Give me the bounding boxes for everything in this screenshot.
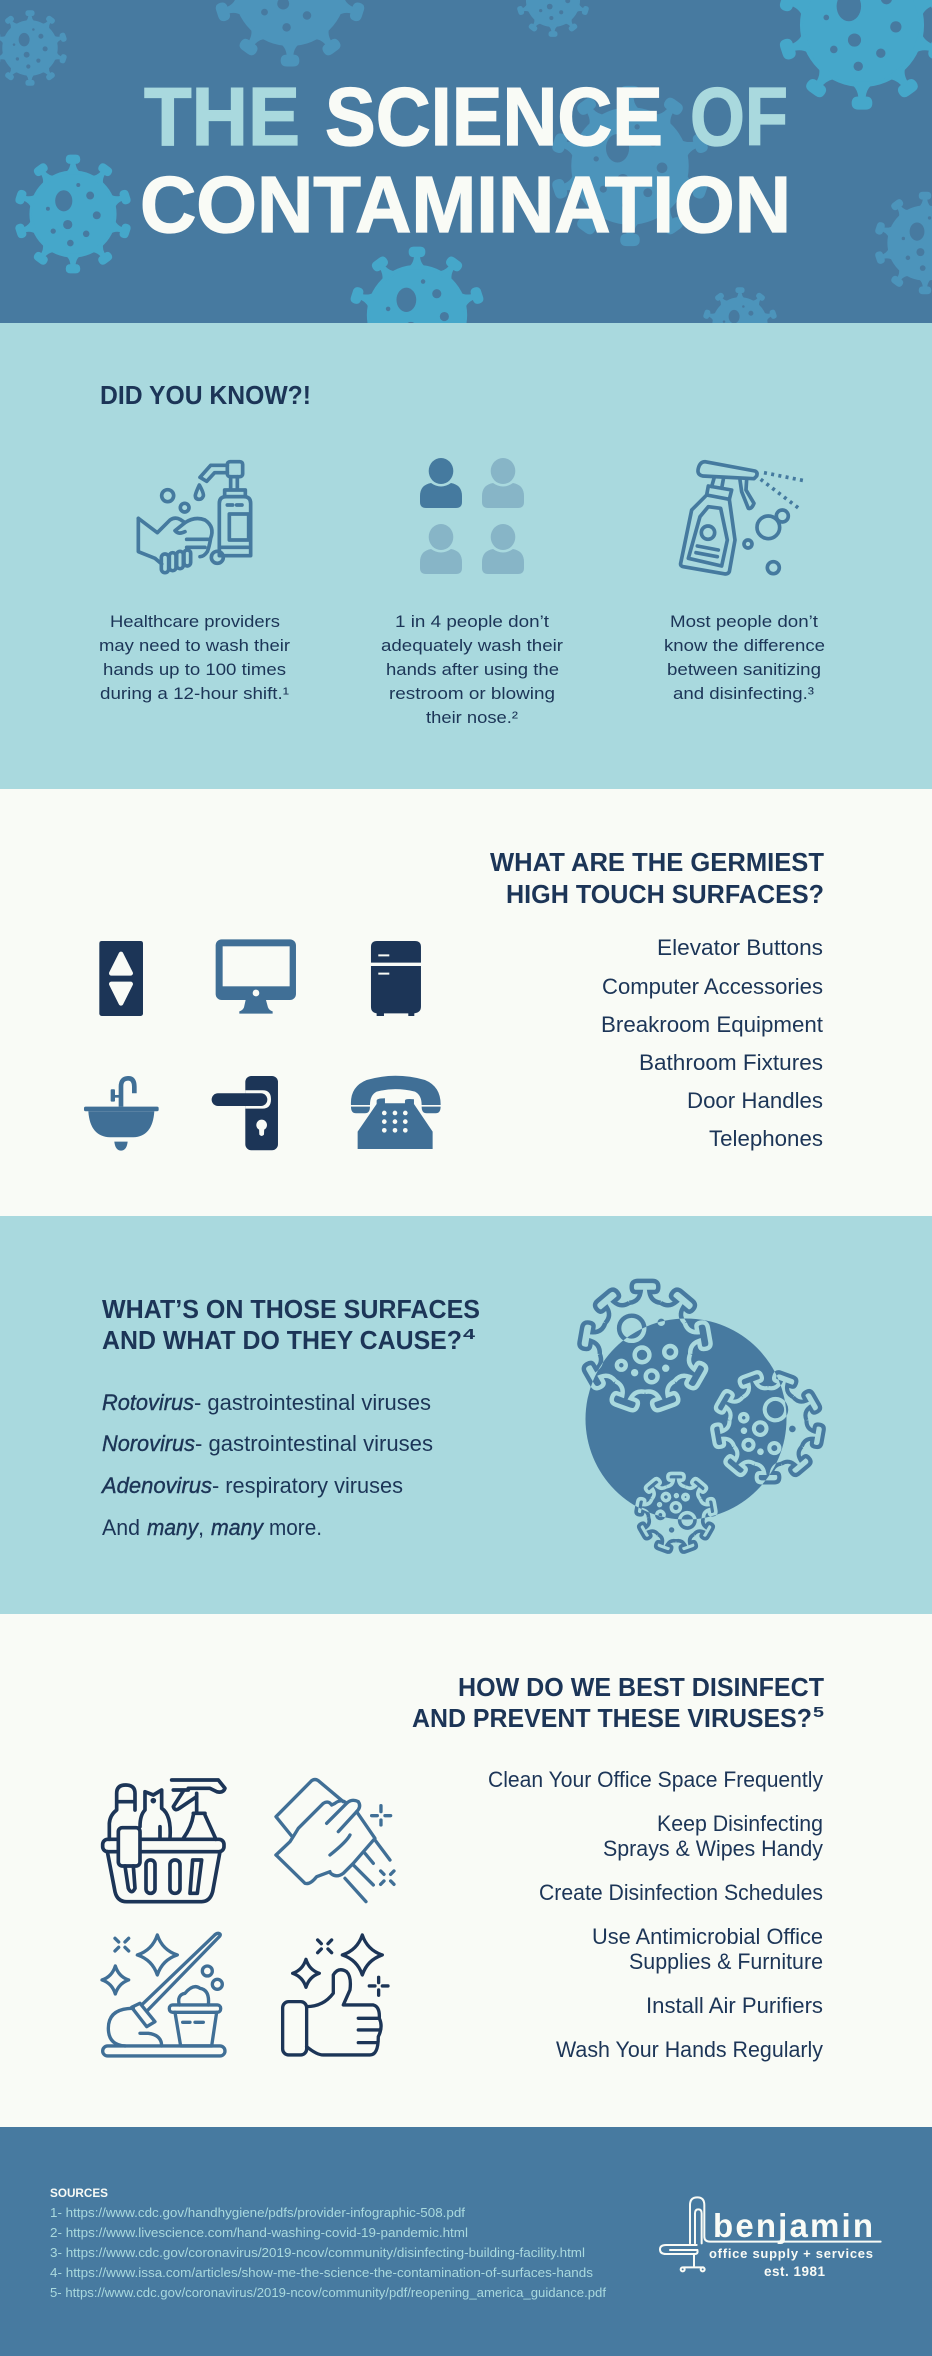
fact: one in four people: adequately wash their (381, 636, 563, 655)
list: viruses: - gastrointestinal viruses (195, 1431, 433, 1456)
list: viruses: And (102, 1515, 140, 1540)
list: surfaces (601, 935, 823, 1151)
icon: sink (84, 1078, 159, 1151)
panel: disinfect and prevent (0, 1614, 932, 2127)
heading: disinfect and prevent: HOW DO WE BEST DISINFECT (458, 1672, 824, 1702)
list: prevention steps: Sprays & Wipes Handy (603, 1836, 823, 1861)
list: surfaces: Door Handles (687, 1088, 823, 1113)
heading: surfaces and causes: WHAT’S ON THOSE SURFACES (102, 1294, 480, 1324)
fact: sanitizing vs disinfecting (664, 612, 825, 703)
fact: one in four people: 1 in 4 people don’t (395, 612, 549, 631)
list: viruses: many (147, 1515, 200, 1540)
title: CONTAMINATION (140, 160, 791, 249)
fact: healthcare providers: Healthcare providers (110, 612, 280, 631)
fact: one in four people: hands after using the (386, 660, 559, 679)
illustration: viruses over circle (578, 1281, 844, 1564)
list: surfaces: Computer Accessories (602, 974, 823, 999)
list: viruses: Rotovirus (102, 1390, 194, 1415)
heading: disinfect and prevent (412, 1672, 824, 1733)
logo: benjamin office supply: benjamin (713, 2207, 873, 2244)
icon: mop and bucket (102, 1933, 225, 2056)
logo: benjamin office supply (660, 2197, 881, 2279)
list: prevention steps: Install Air Purifiers (646, 1993, 823, 2018)
title: THE (144, 70, 300, 163)
list: viruses: many (211, 1515, 265, 1540)
icon: wiping hand (276, 1779, 394, 1902)
header panel (0, 0, 932, 323)
icon: hand washing with soap pump (138, 462, 251, 573)
sources: 4- https://www.issa.com/articles/show-me-the-science-the-contamination-of-surfaces-hands (50, 2266, 593, 2280)
sources: 1- https://www.cdc.gov/handhygiene/pdfs/provider-infographic-508.pdf (50, 2206, 466, 2220)
fact: sanitizing vs disinfecting: know the difference (664, 636, 825, 655)
icon: elevator buttons (99, 941, 143, 1016)
heading: germiest surfaces: WHAT ARE THE GERMIEST (490, 847, 824, 877)
list: viruses: - gastrointestinal viruses (194, 1390, 431, 1415)
list: prevention steps: Create Disinfection Schedules (539, 1880, 823, 1905)
list: viruses: Norovirus (102, 1431, 195, 1456)
list: viruses: - respiratory viruses (212, 1473, 403, 1498)
icon: one in four people (420, 458, 524, 574)
icon: computer monitor (216, 939, 296, 1014)
sources: 3- https://www.cdc.gov/coronavirus/2019-ncov/community/disinfecting-building-facility.html (50, 2246, 585, 2260)
heading: surfaces and causes: 4 (463, 1326, 476, 1343)
icon: fridge (371, 941, 421, 1016)
sources (50, 2186, 607, 2300)
list: surfaces: Breakroom Equipment (601, 1012, 823, 1037)
list: viruses (100, 1390, 433, 1540)
fact: sanitizing vs disinfecting: Most people don’t (670, 612, 818, 631)
logo: benjamin office supply: est. 1981 (764, 2264, 825, 2279)
title: SCIENCE (325, 70, 663, 163)
panel: footer (0, 2127, 932, 2356)
decorative virus cluster (0, 0, 932, 383)
list: prevention steps: Clean Your Office Space Frequently (488, 1767, 823, 1792)
icon: telephone (351, 1076, 441, 1149)
heading: germiest surfaces: HIGH TOUCH SURFACES? (506, 879, 824, 909)
fact: healthcare providers: during a 12-hour shift.¹ (100, 684, 289, 703)
heading: disinfect and prevent: AND PREVENT THESE VIRUSES? (412, 1703, 812, 1733)
list: viruses: , (198, 1515, 204, 1540)
heading: germiest surfaces (490, 847, 824, 909)
sources: 2- https://www.livescience.com/hand-washing-covid-19-pandemic.html (50, 2226, 468, 2240)
icon: thumbs up (283, 1935, 388, 2055)
title (140, 70, 791, 249)
heading: did you know: DID YOU KNOW?! (100, 380, 311, 410)
icon: door handle (212, 1076, 278, 1150)
panel: did you know (0, 323, 932, 789)
list: viruses: more. (269, 1515, 322, 1540)
fact: one in four people (381, 612, 563, 727)
title: OF (690, 70, 788, 163)
list: prevention steps: Keep Disinfecting (657, 1811, 823, 1836)
list: surfaces: Telephones (709, 1126, 823, 1151)
icon: cleaning basket (103, 1780, 225, 1902)
list: prevention steps (488, 1767, 823, 2062)
list: prevention steps: Supplies & Furniture (629, 1949, 823, 1974)
heading: disinfect and prevent: 5 (813, 1704, 824, 1721)
panel: what is on surfaces (0, 1216, 932, 1614)
fact: one in four people: their nose.² (426, 708, 518, 727)
sources: 5- https://www.cdc.gov/coronavirus/2019-ncov/community/pdf/reopening_america_guidance.pdf (50, 2286, 607, 2300)
heading: surfaces and causes: AND WHAT DO THEY CAUSE? (102, 1325, 462, 1355)
panel: germiest surfaces (0, 789, 932, 1216)
sources: SOURCES (50, 2186, 108, 2200)
fact: one in four people: restroom or blowing (389, 684, 555, 703)
fact: sanitizing vs disinfecting: and disinfecting.³ (673, 684, 814, 703)
list: prevention steps: Wash Your Hands Regularly (556, 2037, 823, 2062)
logo: benjamin office supply: office supply + services (709, 2246, 873, 2261)
fact: sanitizing vs disinfecting: between sanitizing (667, 660, 821, 679)
list: prevention steps: Use Antimicrobial Office (592, 1924, 823, 1949)
fact: healthcare providers (99, 612, 290, 703)
fact: healthcare providers: hands up to 100 times (103, 660, 286, 679)
fact: healthcare providers: may need to wash their (99, 636, 290, 655)
icon: spray bottle (681, 462, 804, 574)
heading: surfaces and causes (102, 1294, 480, 1355)
list: surfaces: Bathroom Fixtures (639, 1050, 823, 1075)
list: surfaces: Elevator Buttons (657, 935, 823, 960)
list: viruses: Adenovirus (100, 1473, 212, 1498)
